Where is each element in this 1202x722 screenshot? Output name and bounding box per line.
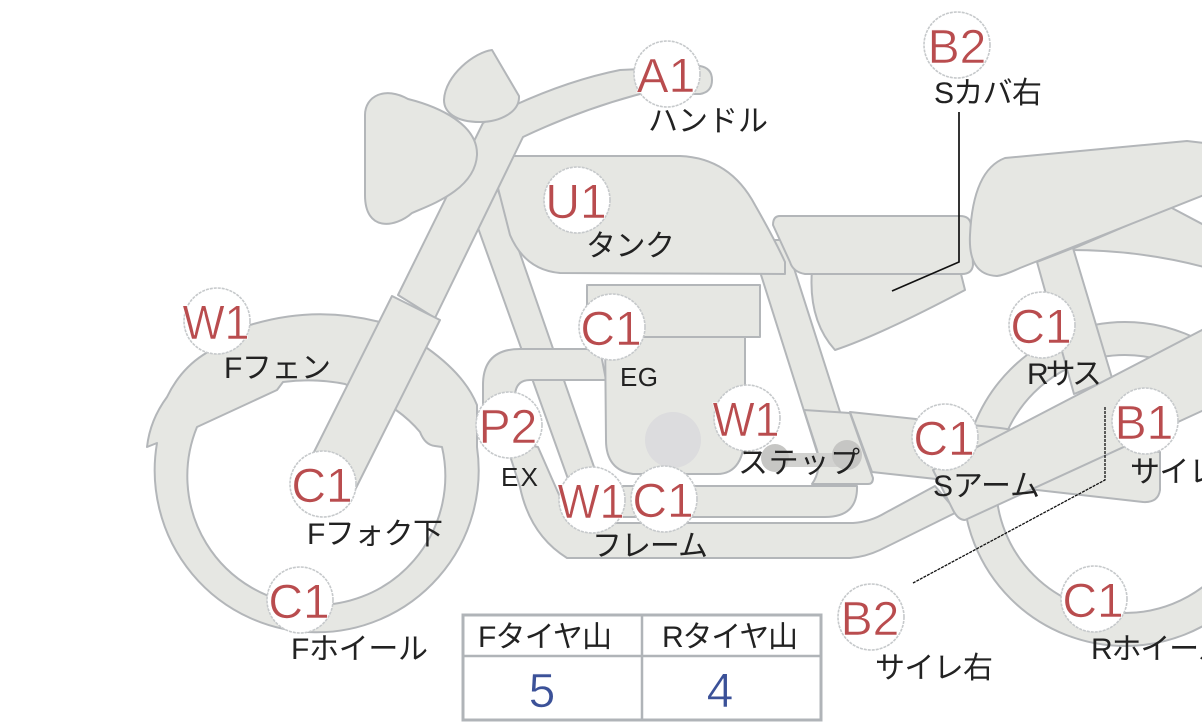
leader line: muffler [913, 407, 1105, 583]
down tube [468, 190, 602, 490]
label S cover right: Sカバ右 [934, 77, 1042, 110]
badge C1 shock: C1 [1010, 301, 1072, 354]
rear frame tube [750, 240, 840, 452]
upper fork and handlebar [398, 66, 712, 318]
footrest plate [804, 410, 873, 484]
engine lower [605, 330, 745, 474]
label R suspension: Rサス [1027, 358, 1102, 391]
tire tread table [463, 615, 821, 720]
engine upper [587, 285, 760, 337]
step bar [761, 440, 862, 472]
label lower fork: Fフォク下 [307, 518, 443, 551]
label tank: タンク [586, 230, 675, 263]
badge B2 top: B2 [928, 21, 986, 74]
front wheel and fender [147, 314, 479, 632]
badge W1 fender: W1 [182, 297, 250, 350]
label F fender: Fフェン [224, 352, 331, 385]
seat [970, 141, 1202, 276]
muffler [933, 329, 1202, 520]
label silencer right: サイレ右 [875, 652, 993, 685]
value F tire: 5 [529, 665, 555, 718]
badge C1 fork: C1 [291, 460, 353, 513]
table header R: Rタイヤ山 [662, 621, 798, 654]
rear fender [1070, 207, 1202, 267]
badge C1 rear wheel: C1 [1062, 575, 1124, 628]
value R tire: 4 [707, 665, 733, 718]
badge P2: P2 [479, 401, 537, 454]
meter [444, 50, 519, 122]
frame cross tube [590, 486, 857, 517]
table header F: Fタイヤ山 [478, 621, 612, 654]
badge U1: U1 [545, 176, 607, 229]
badge C1 swing arm: C1 [913, 413, 975, 466]
label handle: ハンドル [648, 105, 768, 138]
rear shock [1037, 248, 1112, 394]
badge C1 front wheel: C1 [268, 576, 330, 629]
badge B1: B1 [1115, 397, 1173, 450]
badge W1 step: W1 [712, 394, 780, 447]
rear wheel [963, 322, 1202, 646]
side cover upper [773, 216, 973, 274]
badge C1 engine: C1 [580, 303, 642, 356]
headlight [365, 93, 477, 224]
label exhaust: EX [501, 462, 538, 492]
lower frame tube [505, 440, 957, 558]
label frame: フレーム [592, 530, 708, 563]
badge B2 muffler: B2 [841, 593, 899, 646]
label front wheel: Fホイール [291, 633, 428, 666]
label engine: EG [620, 362, 658, 392]
motorcycle body [147, 50, 1202, 646]
tank [498, 156, 785, 274]
lower fork [305, 296, 440, 515]
label swing arm: Sアーム [933, 470, 1040, 503]
swing arm [850, 412, 1160, 502]
badge C1 frame: C1 [632, 475, 694, 528]
leader line: S cover [892, 112, 959, 291]
badge A1: A1 [637, 50, 695, 103]
exhaust pipe [483, 349, 606, 415]
badge W1 frame: W1 [558, 476, 624, 529]
label step: ステップ [738, 447, 860, 480]
part labels [224, 77, 1202, 685]
engine circle [645, 412, 701, 468]
badges [182, 12, 1178, 650]
side cover lower [811, 270, 965, 350]
